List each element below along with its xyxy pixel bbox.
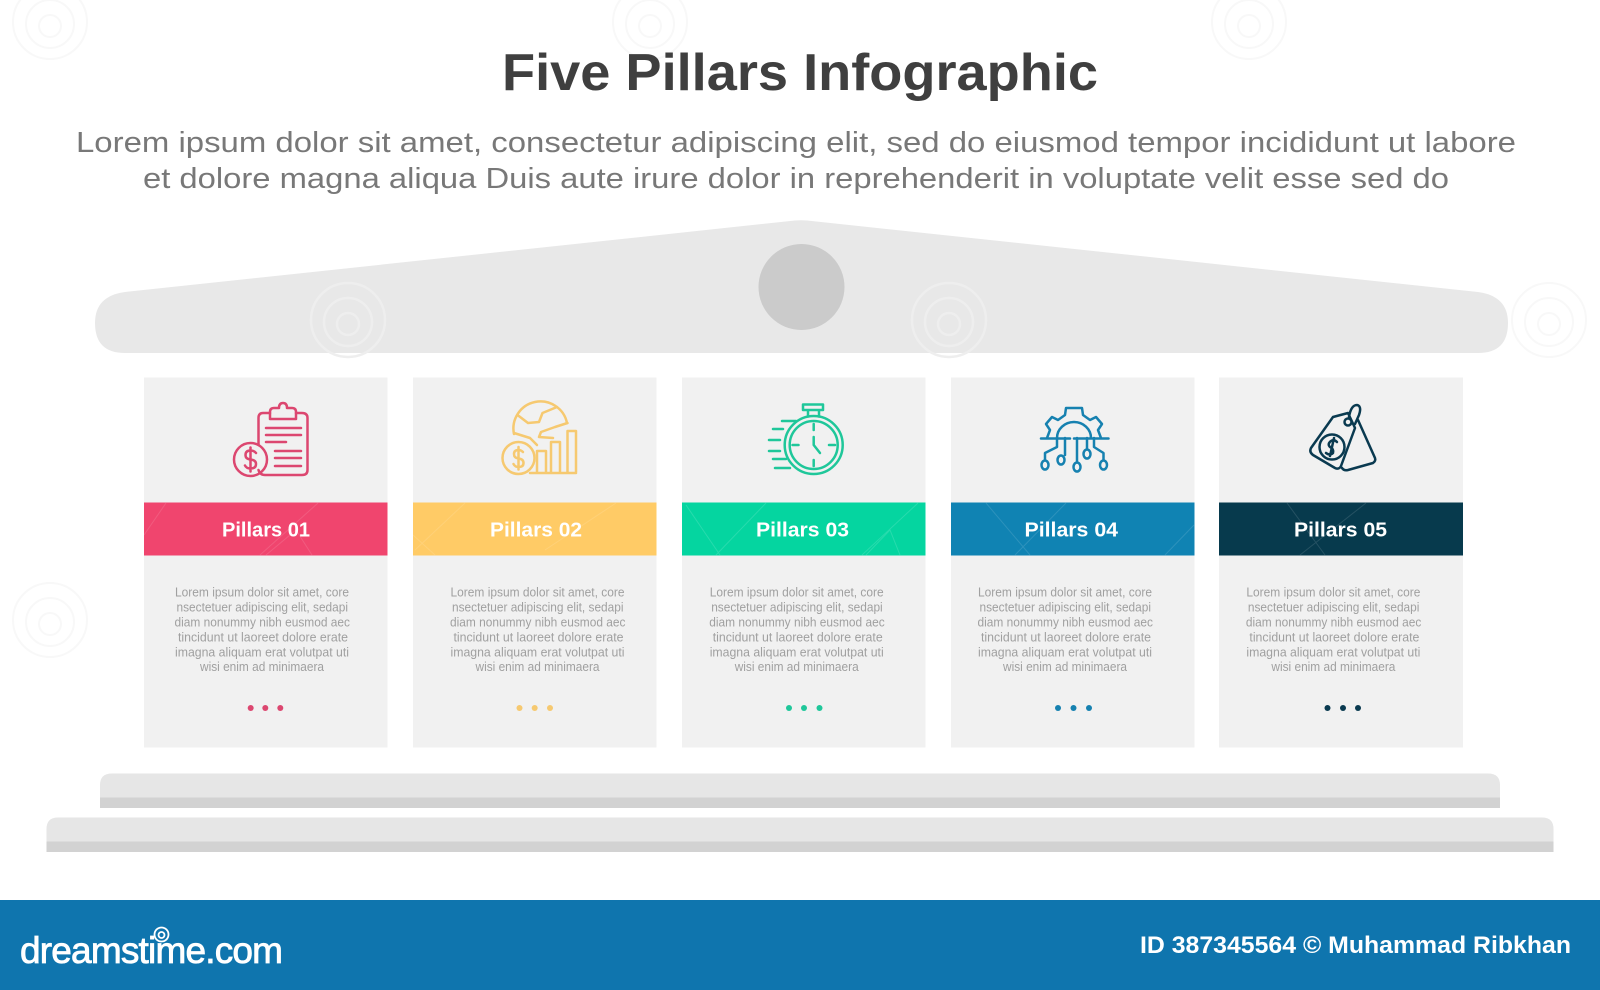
icon: gear with circuit nodes [1041,408,1108,472]
title: Five Pillars Infographic [502,44,1098,102]
icon: price tags with dollar sign [1310,405,1375,470]
body text: wisi enim ad minimaera [1002,660,1127,674]
label band: Pillars 04: Pillars 04 [1024,518,1119,542]
roof circle [758,244,844,330]
body text: Lorem ipsum dolor sit amet, core [710,586,884,600]
label band: Pillars 05: Pillars 05 [1294,518,1387,542]
body text: imagna aliquam erat volutpat uti [710,646,884,660]
body text: diam nonummy nibh eusmod aec [450,616,626,630]
icon: clipboard with dollar coin [234,403,308,476]
dots [1055,705,1092,711]
panel: pillar 05 [1219,378,1463,748]
body text: nsectetuer adipiscing elit, sedapi [1248,600,1419,614]
label band: Pillars 02 [413,502,656,556]
dots [248,705,283,711]
body text: wisi enim ad minimaera [199,660,324,674]
body text: wisi enim ad minimaera [734,660,859,674]
body text: Lorem ipsum dolor sit amet, core [175,586,349,600]
body text: tincidunt ut laoreet dolore erate [454,630,624,644]
body text: nsectetuer adipiscing elit, sedapi [452,600,624,614]
subtitle text [76,127,1516,195]
body text: imagna aliquam erat volutpat uti [450,646,624,660]
body text: wisi enim ad minimaera [1270,660,1395,674]
label band: Pillars 03: Pillars 03 [756,518,849,542]
image ID and credit: ID 387345564 © Muhammad Ribkhan [1140,932,1571,959]
subtitle text: Lorem ipsum dolor sit amet, consectetur adipiscing elit, sed do eiusmod tempor incididunt ut labore [76,127,1516,159]
label band: Pillars 01: Pillars 01 [222,518,310,542]
label band: Pillars 04 [951,502,1194,556]
dots [786,705,822,711]
body text: diam nonummy nibh eusmod aec [1246,616,1421,630]
body text: imagna aliquam erat volutpat uti [978,646,1152,660]
body text: nsectetuer adipiscing elit, sedapi [176,600,348,614]
dots [1324,705,1361,711]
lower base step [46,818,1554,852]
panel: pillar 04 [951,378,1194,748]
body text [174,586,350,674]
upper base step [100,774,1500,808]
body text: diam nonummy nibh eusmod aec [709,616,885,630]
dots [516,705,553,711]
body text: tincidunt ut laoreet dolore erate [178,630,348,644]
body text: Lorem ipsum dolor sit amet, core [1246,586,1420,600]
body text: nsectetuer adipiscing elit, sedapi [711,600,883,614]
label band: Pillars 01 [144,502,388,556]
label band: Pillars 02: Pillars 02 [490,518,582,542]
body text [1246,586,1421,674]
label band: Pillars 05 [1219,502,1463,556]
body text: wisi enim ad minimaera [475,660,600,674]
body text: imagna aliquam erat volutpat uti [1246,646,1420,660]
subtitle text: et dolore magna aliqua Duis aute irure dolor in reprehenderit in voluptate velit esse sed do [143,163,1449,195]
body text: tincidunt ut laoreet dolore erate [1249,630,1419,644]
body text: tincidunt ut laoreet dolore erate [713,630,883,644]
panel: pillar 03 [682,378,926,748]
body text: tincidunt ut laoreet dolore erate [981,630,1151,644]
footer bar [0,900,1600,990]
body text [709,586,885,674]
body text [450,586,626,674]
body text: Lorem ipsum dolor sit amet, core [978,586,1152,600]
body text [978,586,1153,674]
body text: diam nonummy nibh eusmod aec [174,616,350,630]
body text: Lorem ipsum dolor sit amet, core [450,586,624,600]
body text: diam nonummy nibh eusmod aec [978,616,1153,630]
panel: pillar 02 [413,378,656,748]
panel: pillar 01 [144,378,388,748]
logo text: dreamstime.com [20,930,283,971]
temple roof [95,220,1508,353]
body text: imagna aliquam erat volutpat uti [175,646,349,660]
icon: logo spiral [154,928,168,942]
body text: nsectetuer adipiscing elit, sedapi [980,600,1151,614]
icon: globe with coin and bar chart [502,401,576,474]
icon: stopwatch with speed lines [769,404,843,474]
label band: Pillars 03 [682,502,926,556]
